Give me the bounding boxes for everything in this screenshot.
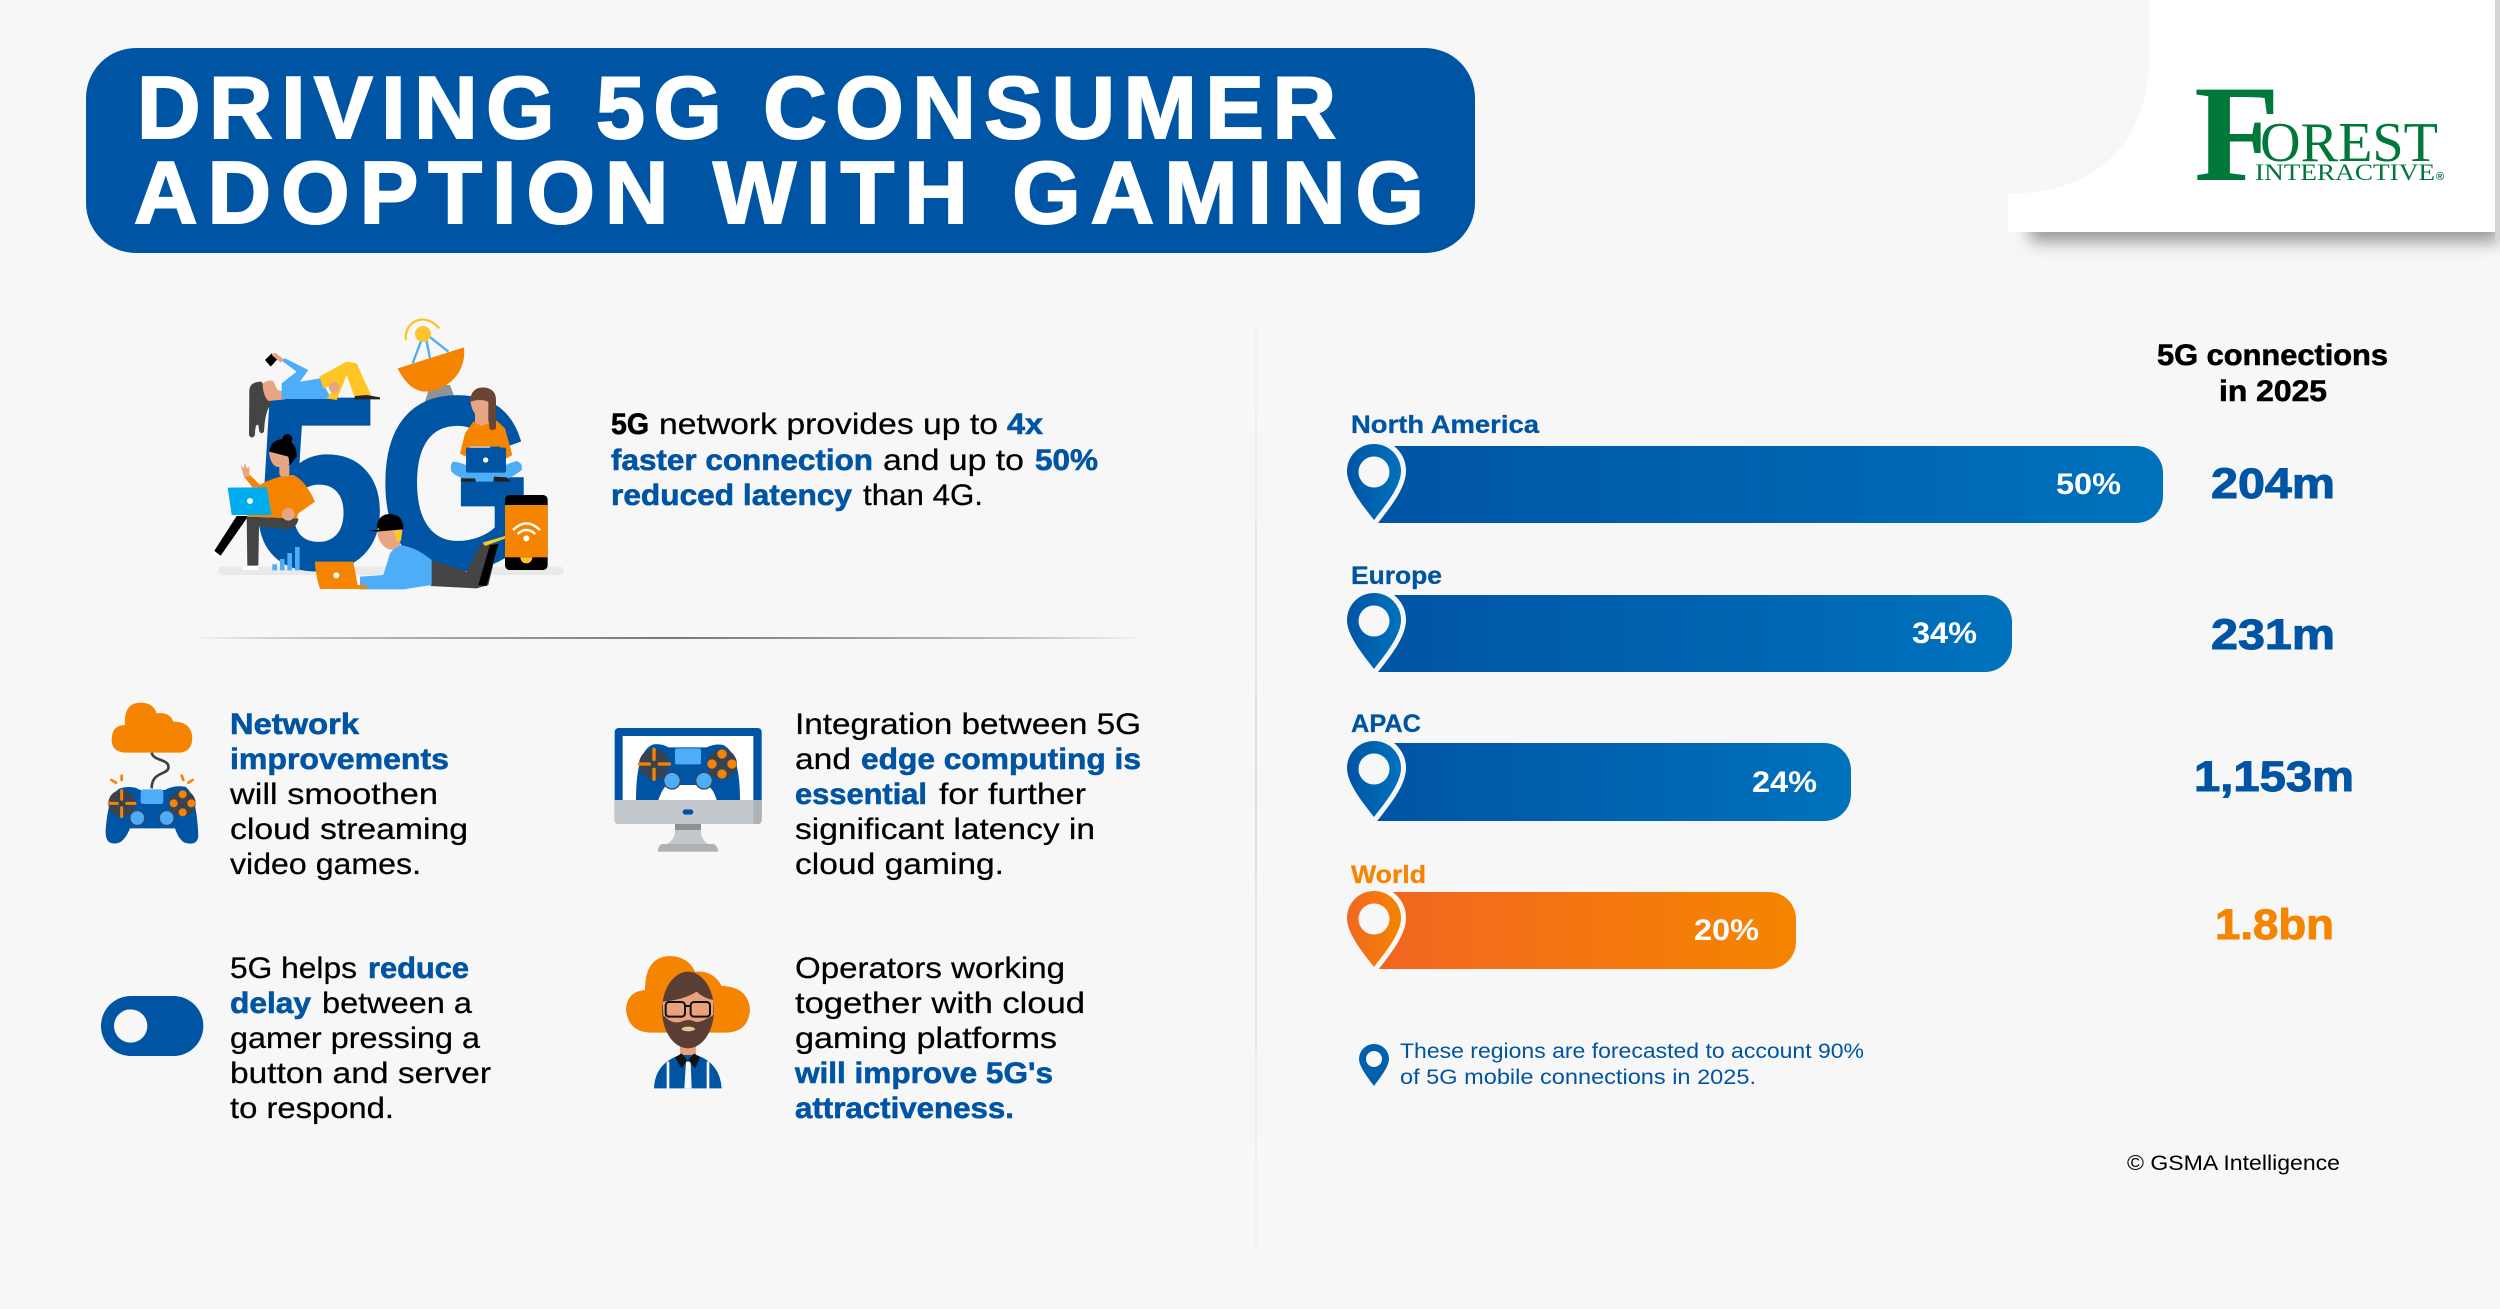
text block: operators: Operators working [795, 952, 1065, 985]
person lying with laptop [315, 514, 505, 589]
icon: monitor with gamepad [615, 728, 762, 852]
big 5G lettering: G [378, 346, 535, 620]
big 5G lettering [253, 346, 535, 620]
bar: North America: 204m [2211, 460, 2335, 508]
text block: 5G speed: than 4G. [863, 479, 983, 512]
title banner: DRIVING 5G CONSUMER [137, 58, 1336, 157]
bar: North America [1347, 411, 2335, 523]
text block: reduce delay: to respond. [230, 1092, 394, 1125]
column heading: 5G connections [2157, 339, 2388, 408]
logo wordmark: ® [2436, 171, 2444, 183]
text block: 5G speed: network provides up to [659, 408, 998, 441]
footnote with pin: These regions are forecasted to account 90% [1400, 1040, 1864, 1063]
text block: reduce delay: delay [230, 987, 311, 1020]
text block: edge computing: cloud gaming. [795, 848, 1004, 881]
text block: operators: gaming platforms [795, 1022, 1057, 1055]
bar: APAC [1347, 710, 2354, 821]
text block: operators: attractiveness. [795, 1092, 1014, 1125]
text block: edge computing: and [795, 743, 851, 776]
big 5G lettering: 5 [253, 346, 385, 620]
text block: 5G speed: 4x [1007, 408, 1043, 441]
title banner [86, 48, 1475, 253]
icon: toggle switch [101, 996, 203, 1056]
text block: 5G speed: 5G [611, 408, 649, 441]
text block: edge computing [795, 708, 1141, 881]
text block: 5G speed: faster connection [611, 444, 873, 477]
footnote with pin: of 5G mobile connections in 2025. [1400, 1066, 1756, 1089]
text block: reduce delay: between a [322, 987, 472, 1020]
bar: World [1347, 861, 2334, 969]
bar: APAC: APAC [1351, 710, 1421, 738]
bar: World: 1.8bn [2215, 901, 2334, 949]
text block: 5G speed: reduced latency [611, 479, 852, 512]
text block: reduce delay: reduce [368, 952, 469, 985]
text block: network improvements: will smoothen [229, 778, 438, 811]
text block: edge computing: significant latency in [795, 813, 1095, 846]
text block: 5G speed: and up to [883, 444, 1024, 477]
column heading: 5G connections: 5G connections [2157, 339, 2388, 372]
person lying on top of 5 [249, 353, 380, 437]
bar: APAC: 24% [1752, 766, 1817, 799]
logo wordmark [2194, 57, 2444, 210]
text block: reduce delay [230, 952, 491, 1125]
logo wordmark: F [2194, 57, 2280, 210]
text block: edge computing: Integration between 5G [795, 708, 1141, 741]
source credit: © GSMA Intelligence [2127, 1152, 2340, 1175]
text block: operators: will improve 5G's [794, 1057, 1053, 1090]
logo panel [2008, 0, 2500, 242]
bar: Europe [1347, 562, 2335, 672]
text block: reduce delay: gamer pressing a [230, 1022, 480, 1055]
logo wordmark: INTERACTIVE [2255, 160, 2435, 185]
title banner: ADOPTION WITH GAMING [134, 143, 1424, 242]
text block: reduce delay: button and server [230, 1057, 491, 1090]
bar: North America: North America [1351, 411, 1540, 439]
icon: smartphone with wifi [505, 495, 548, 570]
text block: network improvements: improvements [230, 743, 449, 776]
bar: World: World [1351, 861, 1426, 889]
person seated on G with laptop [451, 387, 522, 482]
text block: network improvements [229, 708, 468, 881]
bar: World: 20% [1694, 914, 1759, 947]
icon: cloud with gamepad [106, 703, 198, 844]
icon: person with cloud [626, 956, 750, 1089]
footnote with pin [1359, 1040, 1864, 1089]
text block: network improvements: video games. [230, 848, 421, 881]
icon: satellite dish [398, 320, 464, 402]
text block: operators [794, 952, 1085, 1125]
text block: network improvements: Network [230, 708, 359, 741]
bar: Europe: 231m [2211, 611, 2335, 659]
column heading: 5G connections: in 2025 [2219, 375, 2327, 408]
bar: North America: 50% [2056, 468, 2121, 501]
text block: edge computing: for further [939, 778, 1086, 811]
text block: 5G speed [611, 408, 1098, 512]
bar: APAC: 1,153m [2194, 753, 2354, 801]
small signal bars [272, 547, 300, 570]
illustration: 5G with people [208, 320, 564, 620]
bar: Europe: Europe [1351, 562, 1442, 590]
logo wordmark: OREST [2260, 112, 2438, 174]
text block: operators: together with cloud [795, 987, 1085, 1020]
bar: Europe: 34% [1912, 617, 1977, 650]
text block: edge computing: essential [795, 778, 927, 811]
text block: 5G speed: 50% [1035, 444, 1098, 477]
text block: edge computing: edge computing is [861, 743, 1141, 776]
text block: reduce delay: 5G helps [230, 952, 357, 985]
text block: network improvements: cloud streaming [230, 813, 468, 846]
person seated with laptop [208, 434, 315, 570]
